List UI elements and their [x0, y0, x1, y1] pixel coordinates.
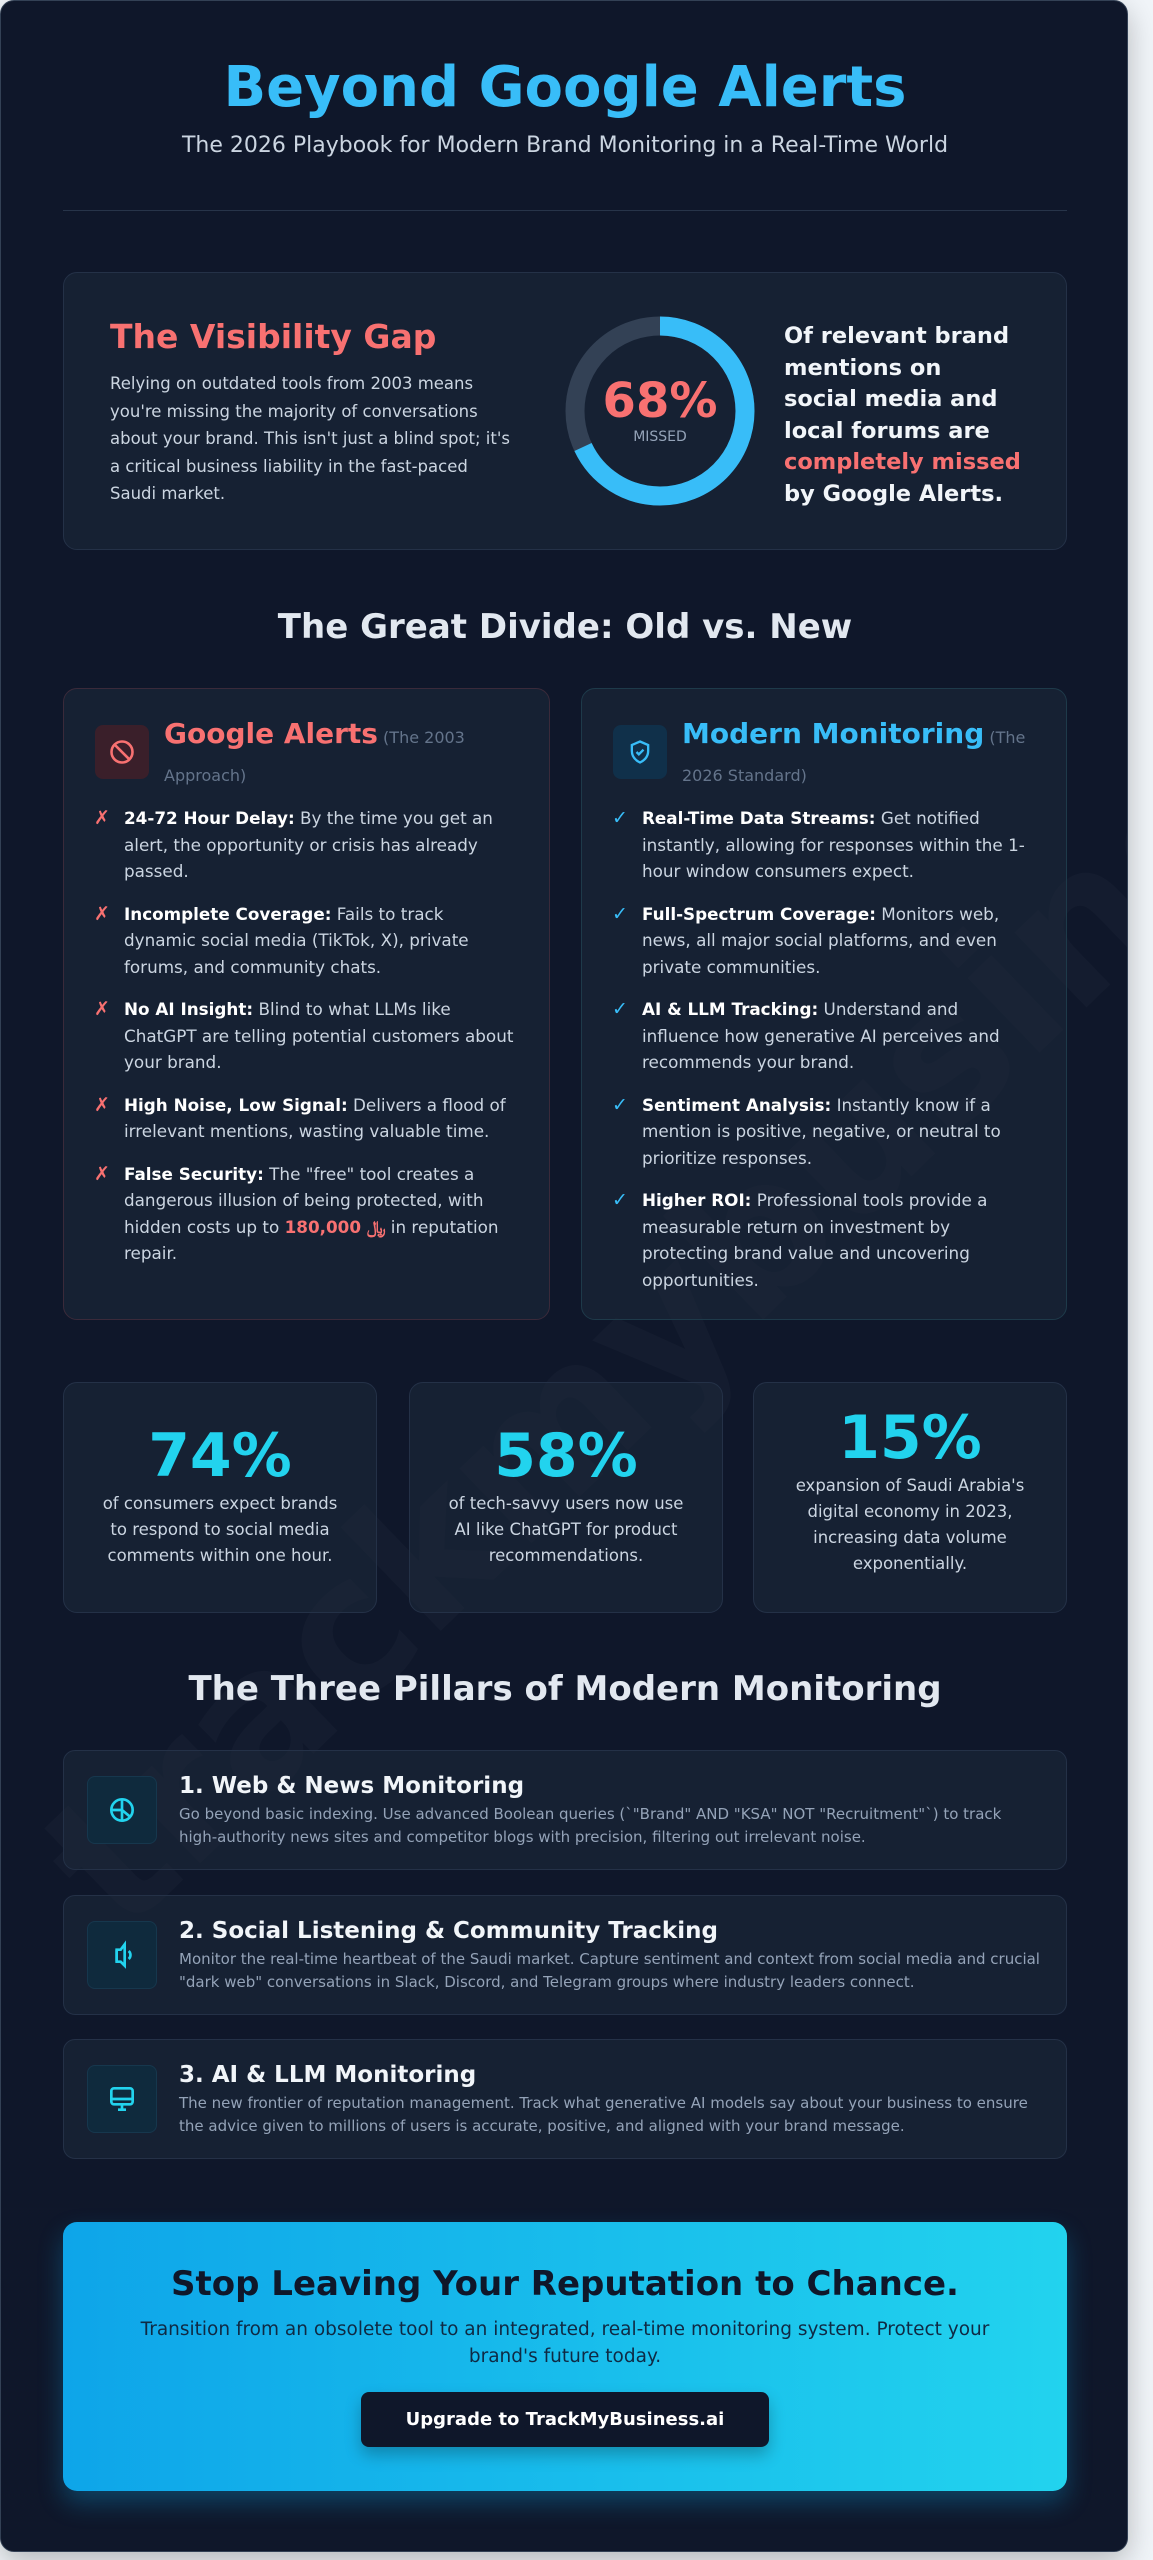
- title: Beyond Google Alerts: [224, 55, 906, 120]
- list: modern benefits: ✓: [612, 902, 628, 924]
- text block: gap description: Relying on outdated tools from 2003 means you're missing the majority of conversations about your brand. This isn't just a blind spot; it's a critical business liability in the fast-paced Saudi market.: [110, 374, 510, 503]
- list: modern benefits: Full-Spectrum Coverage: Monitors web, news, all major social platforms, and even private communities.: [642, 904, 999, 976]
- list: modern benefits: Higher ROI: Professional tools provide a measurable return on investment by protecting brand value and uncovering opportunities.: [642, 1190, 987, 1290]
- stat card: 15%: [753, 1382, 1067, 1613]
- list: old drawbacks: passed.: [124, 861, 189, 881]
- stat card: 74%: 74%: [148, 1421, 292, 1491]
- text block: stat explanation: local forums are: [784, 418, 990, 444]
- list: old drawbacks: ✗: [94, 902, 110, 924]
- stat card: 74%: [63, 1382, 377, 1613]
- chart: donut 68% missed: [566, 316, 754, 506]
- heading: Google Alerts: Google Alerts (The 2003 Approach): [164, 717, 465, 785]
- list: old drawbacks: ✗: [94, 807, 110, 829]
- list: old drawbacks: False Security: The "free" tool creates a: [124, 1164, 474, 1184]
- list: modern benefits: ✓: [612, 1189, 628, 1211]
- list: modern benefits: ✓: [612, 1094, 628, 1116]
- panel: google alerts: [63, 688, 550, 1320]
- list: old drawbacks: Incomplete Coverage: Fails to track: [124, 904, 443, 924]
- text block: stat explanation: by Google Alerts.: [784, 480, 1003, 506]
- list: old drawbacks: dynamic social media (TikTok, X), private: [124, 930, 469, 950]
- list: old drawbacks: repair.: [124, 1243, 177, 1263]
- icon: shield check: [613, 725, 667, 779]
- list: old drawbacks: alert, the opportunity or crisis has already: [124, 834, 478, 854]
- list: modern benefits: [612, 807, 1025, 1290]
- stat card: 15%: expansion of Saudi Arabia's digital economy in 2023, increasing data volume exponentially.: [796, 1476, 1024, 1573]
- list: old drawbacks: ChatGPT are telling potential customers about: [124, 1026, 513, 1046]
- pillar: AI & LLM: [63, 2039, 1067, 2159]
- icon: monitor: [87, 2065, 157, 2133]
- pillar: social listening: 2. Social Listening & Community Tracking: [179, 1918, 718, 1944]
- list: old drawbacks: No AI Insight: Blind to what LLMs like: [124, 999, 451, 1019]
- list: modern benefits: ✓: [612, 998, 628, 1020]
- list: old drawbacks: irrelevant mentions, wasting valuable time.: [124, 1121, 489, 1141]
- panel: modern monitoring: [581, 688, 1067, 1320]
- pillar: social listening: [63, 1895, 1067, 2015]
- chart: donut 68% missed: 68%: [603, 373, 717, 429]
- heading: three pillars: The Three Pillars of Modern Monitoring: [188, 1669, 942, 1709]
- list: old drawbacks: hidden costs up to 180,000 ﷼ in reputation: [124, 1216, 499, 1236]
- list: old drawbacks: ✗: [94, 1094, 110, 1116]
- button: upgrade: Upgrade to TrackMyBusiness.ai: [406, 2409, 724, 2430]
- text block: stat explanation: [784, 323, 1021, 506]
- stat card: 58%: 58%: [494, 1421, 638, 1491]
- list: old drawbacks: ✗: [94, 998, 110, 1020]
- pillar: web & news: 1. Web & News Monitoring: [179, 1773, 524, 1799]
- list: old drawbacks: dangerous illusion of being protected, with: [124, 1190, 484, 1210]
- list: modern benefits: Real-Time Data Streams: Get notified instantly, allowing for responses within the 1-hour window consumers expect.: [642, 808, 1025, 881]
- icon: globe: [87, 1776, 157, 1844]
- subtitle: The 2026 Playbook for Modern Brand Monitoring in a Real-Time World: [182, 133, 948, 158]
- list: old drawbacks: forums, and community chats.: [124, 956, 381, 976]
- chart: donut 68% missed: MISSED: [633, 429, 687, 445]
- list: old drawbacks: ✗: [94, 1162, 110, 1184]
- list: old drawbacks: your brand.: [124, 1052, 222, 1072]
- icon: ban: [95, 725, 149, 779]
- stat card: 58%: of tech-savvy users now use AI like ChatGPT for product recommendations.: [449, 1494, 683, 1565]
- panel: call to action: [63, 2222, 1067, 2491]
- pillar: AI & LLM: 3. AI & LLM Monitoring: [179, 2062, 476, 2088]
- heading: The Visibility Gap: The Visibility Gap: [110, 317, 436, 356]
- pillar: web & news: [63, 1750, 1067, 1870]
- panel: visibility gap: [63, 272, 1067, 550]
- pillar: AI & LLM: The new frontier of reputation management. Track what generative AI models say about your business to ensure the advice given to millions of users is accurate, positive, and aligned with your brand message.: [179, 2094, 1028, 2135]
- text block: stat explanation: social media and: [784, 386, 997, 412]
- text block: stat explanation: mentions on: [784, 354, 941, 380]
- heading: Modern Monitoring: Modern Monitoring (The 2026 Standard): [682, 717, 1025, 785]
- stat card: 74%: of consumers expect brands to respond to social media comments within one hour.: [103, 1494, 337, 1565]
- heading: CTA: Stop Leaving Your Reputation to Chance.: [171, 2264, 959, 2304]
- list: modern benefits: AI & LLM Tracking: Understand and influence how generative AI perceives and recommends your brand.: [642, 999, 1000, 1072]
- text block: stat explanation: Of relevant brand: [784, 323, 1009, 349]
- list: old drawbacks: 24-72 Hour Delay: By the time you get an: [124, 808, 493, 828]
- list: old drawbacks: [94, 807, 514, 1263]
- pillar: web & news: high-authority news sites and competitor blogs with precision, filtering out irrelevant noise.: [179, 1828, 866, 1846]
- heading: great divide: The Great Divide: Old vs. New: [278, 607, 852, 647]
- text block: CTA: Transition from an obsolete tool to an integrated, real-time monitoring system. Protect your brand's future today.: [141, 2319, 989, 2367]
- icon: megaphone: [87, 1921, 157, 1989]
- stat card: 15%: 15%: [838, 1403, 982, 1473]
- button: upgrade: [361, 2392, 769, 2447]
- list: old drawbacks: High Noise, Low Signal: Delivers a flood of: [124, 1094, 506, 1114]
- pillar: social listening: Monitor the real-time heartbeat of the Saudi market. Capture sentiment and context from social media and crucial "dark web" conversations in Slack, Discord, and Telegram groups where industry leaders connect.: [179, 1950, 1040, 1991]
- text block: stat explanation: completely missed: [784, 449, 1021, 475]
- pillar: web & news: Go beyond basic indexing. Use advanced Boolean queries (`"Brand" AND "KSA" NOT "Recruitment"`) to track: [179, 1805, 1001, 1823]
- list: modern benefits: Sentiment Analysis: Instantly know if a mention is positive, negative, or neutral to prioritize responses.: [642, 1094, 1001, 1168]
- list: modern benefits: ✓: [612, 807, 628, 829]
- stat card: 58%: [409, 1382, 723, 1613]
